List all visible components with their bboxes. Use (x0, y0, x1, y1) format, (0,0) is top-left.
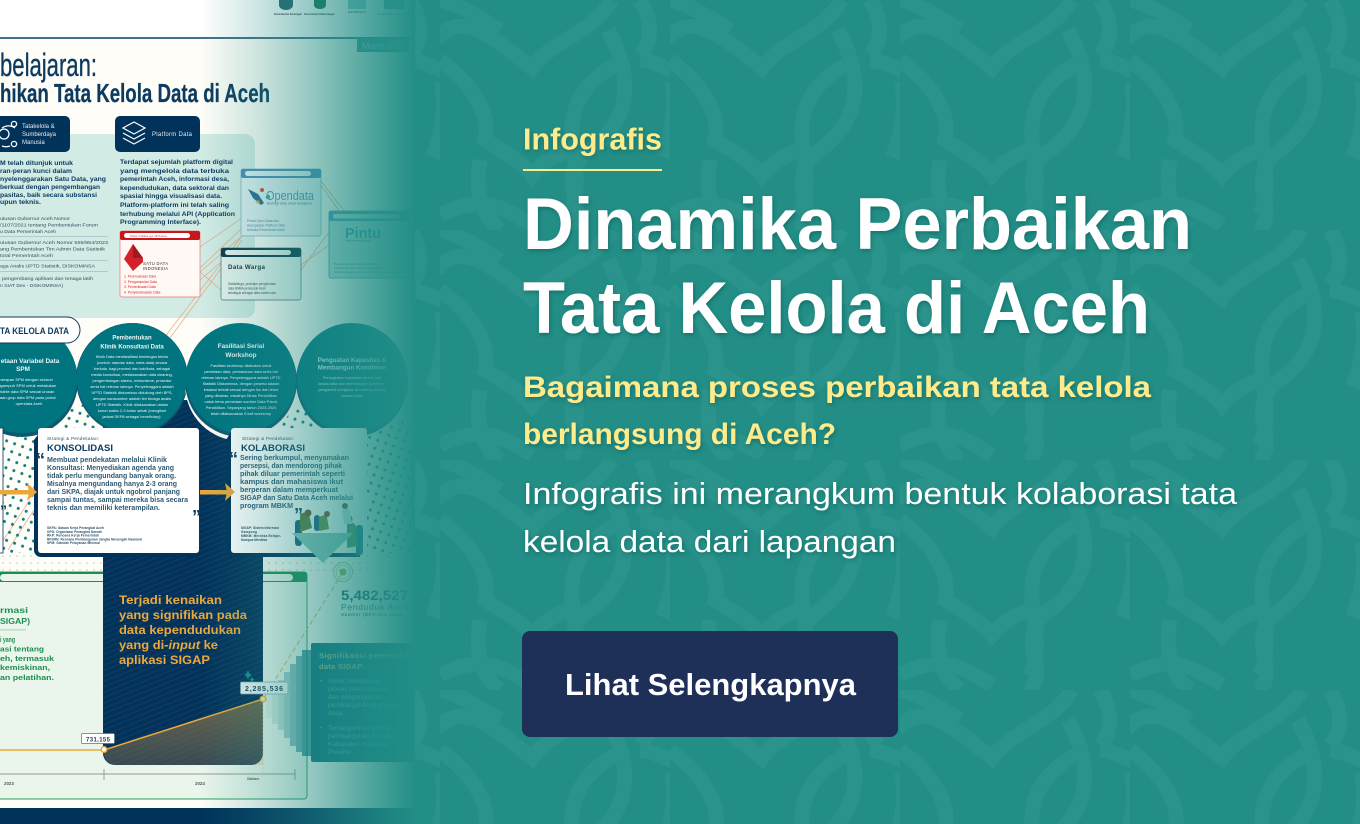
window: satu data indonesia: 2. Pengumpulan Data (124, 280, 157, 284)
circle text: serial workshop: Workshop (225, 352, 257, 359)
background dots left (0, 436, 36, 553)
text block: legal references: n SIAT Dev - DISKOMINSA) (0, 283, 63, 289)
circle text: penguatan kapasitas: pengambil kebijakan di masing-masing (318, 387, 386, 392)
text block: platform: yang mengelola data terbuka (120, 168, 230, 175)
window: opendata: Portal Open Data dan (247, 219, 279, 223)
logos row (274, 0, 410, 16)
background dots between circles right (275, 405, 315, 430)
window: pintu: Pusat Informasi Terpadu (345, 238, 371, 242)
text block: legal references: toral Pemerintah Aceh (0, 253, 53, 259)
card: konsolidasi (34, 428, 201, 557)
card: konsolidasi: tidak perlu mengundang banyak orang. (47, 473, 176, 480)
stat: penduduk aceh: Penduduk Aceh (341, 602, 409, 612)
circle text: pemetaan variabel: opendata Aceh (16, 401, 42, 406)
circle text: klinik konsultasi: jadwal SKPA sebagai beneficiary). (102, 414, 161, 419)
window: satu data indonesia: https://data.go.id/home (130, 234, 167, 238)
card: kolaborasi (226, 428, 367, 563)
footer band (0, 808, 420, 824)
circle text: serial workshop: Fasilitasi workshop dilakukan untuk (211, 363, 272, 368)
circle text: penguatan kapasitas: Penguatan Kapasitas & (318, 357, 387, 364)
panel: signifikansi: pembangunan di tingkat (328, 702, 398, 709)
callout: kenaikan data (119, 595, 248, 667)
text block: tatakelola: upun teknis. (0, 199, 41, 206)
callout: kenaikan data: Terjadi kenaikan (119, 595, 222, 607)
arrow: to konsolidasi (0, 483, 37, 501)
card: konsolidasi: OPD: Organisasi Perangkat Daerah (47, 530, 102, 534)
card: kolaborasi: program MBKM (240, 503, 293, 510)
circle text: klinik konsultasi: pengembangan sistem, mekanisme, prosedur (93, 378, 172, 383)
card: kolaborasi: Kampus Merdeka (241, 538, 267, 542)
card: kolaborasi: persepsi, dan mendorong pihak (240, 463, 342, 470)
panel: green chart panel: i yang (0, 635, 15, 644)
text block: tatakelola: pasitas, baik secara substansi (0, 192, 97, 199)
background dots between circles left (60, 405, 95, 430)
card edge: left: ” (0, 502, 7, 518)
panel: signifikansi: pembangunan ditingkat (328, 733, 396, 740)
circle text: klinik konsultasi: (contoh: standar data, meta data) secara (97, 360, 168, 365)
window: data warga: data BNBA penduduk Aceh (228, 286, 266, 290)
panel: navy highlight (103, 400, 263, 765)
card: konsolidasi: RPJMN: Rencana Pembangunan Jangka Menengah Nasional (47, 538, 142, 542)
card: kolaborasi: kampus dan mahasiswa ikut (240, 479, 344, 486)
logos row: BAPPENAS (348, 10, 366, 14)
circle text: pemetaan variabel: SPM (16, 366, 30, 373)
window: satu data indonesia (120, 231, 200, 297)
text block: tatakelola (0, 160, 106, 206)
circle text: klinik konsultasi: Pembentukan (112, 336, 152, 342)
card: konsolidasi: teknis dan memiliki keterampilan. (47, 505, 160, 512)
text block: legal references: utusan Gubernur Aceh Nomor (0, 216, 70, 222)
circle text: serial workshop (202, 343, 281, 416)
circle text: klinik konsultasi: kurun waktu 2-3 bulan sekali (mengikuti (98, 408, 166, 413)
logos row: Australian Government (378, 12, 410, 16)
card: konsolidasi: Misalnya mengundang hanya 2-3 orang (47, 481, 177, 488)
panel: signifikansi: Kabupaten, Kota dan (328, 741, 389, 748)
stat: penduduk aceh: 5,482,527 (341, 588, 408, 603)
callout: kenaikan data: yang signifikan pada (119, 610, 248, 622)
description (523, 476, 1238, 559)
panel: signifikansi: desa. (328, 710, 344, 717)
card: kolaborasi: SIGAP: Sistem Informasi (241, 526, 279, 530)
data label: 731,155: 731,155 (86, 738, 111, 744)
panel: mint backdrop (0, 134, 255, 318)
text block: legal references: /1107/2021 tentang Pembentukan Forum (0, 222, 98, 228)
solid teal cover (415, 0, 1360, 824)
card: kolaborasi: pihak diluar pemerintah seperti (240, 471, 345, 478)
window: data warga: sekaligus sebagai data warehouse (228, 291, 276, 295)
title: Tata Kelola di Aceh (523, 268, 1150, 349)
poster title (0, 47, 270, 108)
panel: signifikansi: • (320, 678, 323, 685)
panel: green chart panel: eh, termasuk (0, 654, 55, 663)
panel: signifikansi: Provinsi (328, 749, 351, 756)
panel: signifikansi: Untuk mendukung (328, 678, 381, 685)
text block: legal references: aga Analis UPTD Statistik, DISKOMINSA (0, 264, 96, 270)
window: data warga (221, 248, 301, 300)
card: kolaborasi: Sering berkumpul, menyamakan (240, 455, 349, 462)
text block: platform: pemerintah Aceh, informasi desa, (120, 176, 229, 183)
callout: kenaikan data: yang di- input ke (119, 640, 218, 652)
circle text: klinik konsultasi: dengan narasumber adalah tim tenaga analis (93, 396, 171, 401)
panel: signifikansi: dan penganggaran (328, 694, 383, 701)
circles: strategy (0, 323, 408, 441)
poster title: hikan Tata Kelola Data di Aceh (0, 78, 270, 108)
date label (357, 38, 409, 52)
panel: platform data (115, 116, 200, 152)
card: konsolidasi: SKPA: Satuan Kerja Perangkat Aceh (47, 526, 104, 530)
subtitle (523, 371, 1151, 451)
date label: Maret 2025 (362, 41, 405, 51)
window: pintu: Pintu (345, 225, 381, 242)
panel: signifikansi (311, 643, 431, 762)
panel: signifikansi: • (320, 725, 323, 732)
circle text: serial workshop: yang dibahas, misalnya Dinas Pendidikan (205, 393, 277, 398)
panel: green chart panel: an pelatihan. (0, 673, 54, 682)
description: kelola data dari lapangan (523, 524, 896, 559)
button: lihat selengkapnya (522, 631, 898, 737)
circle text: serial workshop: telah dilaksanakan 5 kali workshop (211, 411, 271, 416)
data label: 731,155 (82, 734, 114, 744)
window: opendata: terbuka Pemerintah Aceh (247, 228, 285, 232)
text block: platform: spasial hingga visualisasi data. (120, 193, 222, 200)
callout: kenaikan data: data kependudukan (119, 625, 241, 637)
background dots right (367, 420, 417, 553)
panel: tatakelola: Manusia (22, 140, 45, 146)
text block: platform (120, 159, 235, 226)
panel: signifikansi: proses perencanaan (328, 686, 388, 693)
window: satu data indonesia: 1. Perencanaan Data (124, 274, 156, 278)
data label: 2,285,536: 2,285,536 (245, 686, 283, 693)
text block: tatakelola: ran-peran kunci dalam (0, 168, 72, 175)
logos row: Kementerian Keuangan (274, 12, 302, 16)
text block: legal references: ang Pembentukan Tim Admin Data Statistik (0, 246, 106, 252)
card: kolaborasi: SIGAP dan Satu Data Aceh melalui (240, 495, 353, 502)
eyebrow: infografis: Infografis (523, 122, 662, 156)
arrow: to kolaborasi (200, 483, 235, 501)
circle text: serial workshop: instansi terkait sesuai dengan isu dan tema (204, 387, 279, 392)
circle text: pemetaan variabel (0, 358, 60, 406)
window: opendata: Opendata (266, 188, 315, 203)
text block: legal references: pengembang aplikasi dan tenaga latih (2, 276, 93, 282)
axis: Oktober (247, 777, 260, 781)
panel: green chart panel: kemiskinan, (0, 663, 50, 672)
label: tata kelola data (0, 317, 80, 343)
text block: platform: Platform-platform ini telah saling (120, 202, 229, 209)
card: konsolidasi: ” (192, 507, 201, 527)
subtitle: Bagaimana proses perbaikan tata kelola (523, 371, 1151, 404)
panel: green chart panel: rmasi (0, 606, 28, 615)
circle text: serial workshop: untuk tema pemetaan sumber Data Pokok (205, 399, 277, 404)
circle text: penguatan kapasitas: Peningkatan kapasitas terkait tata (323, 375, 382, 380)
circle text: penguatan kapasitas (318, 357, 387, 398)
card: konsolidasi: KONSOLIDASI (47, 443, 113, 454)
subtitle: berlangsung di Aceh? (523, 418, 836, 451)
card: konsolidasi: “ (36, 450, 45, 470)
text block: platform: Programming Interface). (120, 219, 201, 226)
circle text: klinik konsultasi: Klinik Data memfasilitasi bimbingan teknis (96, 354, 168, 359)
window: data warga: DataWarga, prototipe pengelolaan (228, 282, 276, 286)
panel: tatakelola: Sumberdaya (22, 132, 57, 138)
text block: tatakelola: nyelenggarakan Satu Data, yang (0, 176, 106, 183)
text block: platform: terhubung melalui API (Application (120, 211, 235, 218)
background dots lower (0, 553, 420, 572)
window: pintu: data berbagai sektor di Pemerintah Aceh (334, 270, 396, 274)
stat: penduduk aceh: Sumber (BPS-Jun 2024) (341, 612, 404, 617)
eyebrow underline (523, 169, 662, 171)
axis: 2024 (195, 781, 205, 786)
poster thumbnail (0, 0, 431, 824)
illustration: meeting (292, 503, 363, 563)
card: kolaborasi: “ (229, 449, 238, 469)
title (523, 184, 1192, 349)
card: kolaborasi: Strategi & Pendekatan: (242, 436, 294, 441)
window: pintu (329, 211, 409, 278)
circle text: klinik konsultasi: UPTD Statistik diskominso didukung oleh BPS, (91, 390, 173, 395)
circle text: penguatan kapasitas: kelola data dan membangun komitmen (318, 381, 386, 386)
card: konsolidasi: Membuat pendekatan melalui Klinik (47, 457, 167, 464)
window: data warga: Data Warga (228, 264, 266, 271)
button: lihat selengkapnya: Lihat Selengkapnya (565, 667, 857, 702)
panel: platform data: Platform Data (152, 132, 193, 138)
card: kolaborasi: Gampong (241, 530, 257, 534)
panel: green chart panel: SIGAP) (0, 617, 30, 626)
panel: tatakelola: Tatakelola & (22, 124, 55, 130)
card: konsolidasi: Strategi & Pendekatan: (47, 436, 99, 441)
text block: platform: Terdapat sejumlah platform digital (120, 159, 233, 166)
circle text: pemetaan variabel: etaan Variabel Data (1, 358, 60, 365)
window: satu data indonesia: 4. Penyebarluasan Data (124, 290, 160, 294)
text block: legal references: utusan Gubernur Aceh Nomor 555/954/2023 (0, 240, 108, 246)
title: Dinamika Perbaikan (523, 184, 1192, 265)
panel: signifikansi: data SIGAP: (319, 662, 365, 671)
circle text: klinik konsultasi: UPTD Statistik. Klinik dilaksanakan dalam (96, 402, 168, 407)
card: konsolidasi: sampai tuntas, sampai mereka bisa secara (47, 497, 188, 504)
circle text: klinik konsultasi: berkala, bagi provinsi dan kab/kota, sebagai (94, 366, 170, 371)
window: satu data indonesia: INDONESIA (143, 266, 168, 271)
panel: green chart panel: asi tentang (0, 644, 45, 654)
axis (0, 769, 295, 786)
card: konsolidasi: Konsultasi: Menyediakan agenda yang (47, 465, 174, 472)
connector lines (0, 180, 345, 550)
circle text: serial workshop: relevan lainnya. Penyelenggara adalah UPTD (202, 375, 281, 380)
stat: penduduk aceh (334, 562, 409, 617)
panel: tatakelola (0, 116, 70, 152)
background: interlace pattern (415, 0, 1360, 824)
card: konsolidasi: dari SKPA, diajak untuk ngobrol panjang (47, 489, 180, 496)
circle text: klinik konsultasi: media konsultasi, melaksanakan data cleaning, (91, 372, 173, 377)
circle text: serial workshop: pemetaan data, pemadanan data serta hal (204, 369, 278, 374)
data label: 2,285,536 (240, 682, 288, 694)
text block: legal references: u Data Pemerintah Aceh (0, 229, 56, 235)
circle text: serial workshop: Pendidikan. Sepanjang tahun 2023-2024 (206, 405, 277, 410)
text block: platform: kependudukan, data sektoral dan (120, 185, 229, 192)
circle text: klinik konsultasi (90, 336, 174, 419)
callout: kenaikan data: aplikasi SIGAP (119, 655, 210, 667)
circle text: penguatan kapasitas: Membangun Komitmen (318, 364, 386, 372)
line chart (0, 572, 343, 786)
card: kolaborasi: KOLABORASI (241, 443, 305, 454)
text block: tatakelola: berkuat dengan pengembangan (0, 184, 100, 191)
logos row: Kementerian Dalam Negeri (304, 12, 335, 16)
window: opendata: Geospasial, Platform data (247, 224, 285, 228)
icon: sparkle (244, 670, 254, 682)
window: pintu: Pusat Informasi Terpadu (PINTU), (334, 262, 379, 266)
circle text: serial workshop: Fasilitasi Serial (218, 343, 264, 350)
description: Infografis ini merangkum bentuk kolaborasi tata (523, 476, 1238, 511)
circle text: klinik konsultasi: Klinik Konsultasi Data (100, 344, 164, 350)
window: satu data indonesia: 3. Pemeriksaan Data (124, 285, 156, 289)
panel: signifikansi: Terbangunnya sinergi (328, 725, 390, 732)
window: opendata (241, 169, 321, 236)
text block: tatakelola: M telah ditunjuk untuk (0, 160, 74, 167)
axis: 2023 (4, 781, 14, 786)
text block: legal references (0, 216, 108, 289)
card: kolaborasi: MBKM: Merdeka Belajar- (241, 534, 281, 538)
window: satu data indonesia: SATU DATA (143, 261, 168, 266)
card: kolaborasi: berperan dalam memperkuat (240, 487, 339, 494)
card: konsolidasi: SPM: Standar Pelayanan Minimal (47, 541, 100, 545)
circle text: penguatan kapasitas: satuan kerja (341, 393, 363, 398)
circle text: klinik konsultasi: serta hal relevan lainnya. Penyelenggara adalah (90, 384, 174, 389)
window: pintu: platform dinamis untuk memvisualkan (334, 266, 384, 270)
label: tata kelola data: TA KELOLA DATA (0, 326, 69, 336)
panel: green chart panel (0, 572, 307, 799)
card edge: left (0, 428, 7, 553)
card: konsolidasi: RKP: Rencana Kerja Pemerintah (47, 534, 99, 538)
poster title: belajaran: (0, 47, 97, 83)
window: opendata: Berbagi data untuk kemajuan (267, 202, 312, 206)
card: kolaborasi: ” (294, 505, 303, 525)
circle text: serial workshop: Statistik Diskominsa, dengan peserta adalah (203, 381, 279, 386)
fade steps to right panel (266, 650, 311, 756)
fade overlay over poster (200, 0, 416, 824)
panel: signifikansi: Signifikansi pemenuhan (319, 651, 414, 660)
